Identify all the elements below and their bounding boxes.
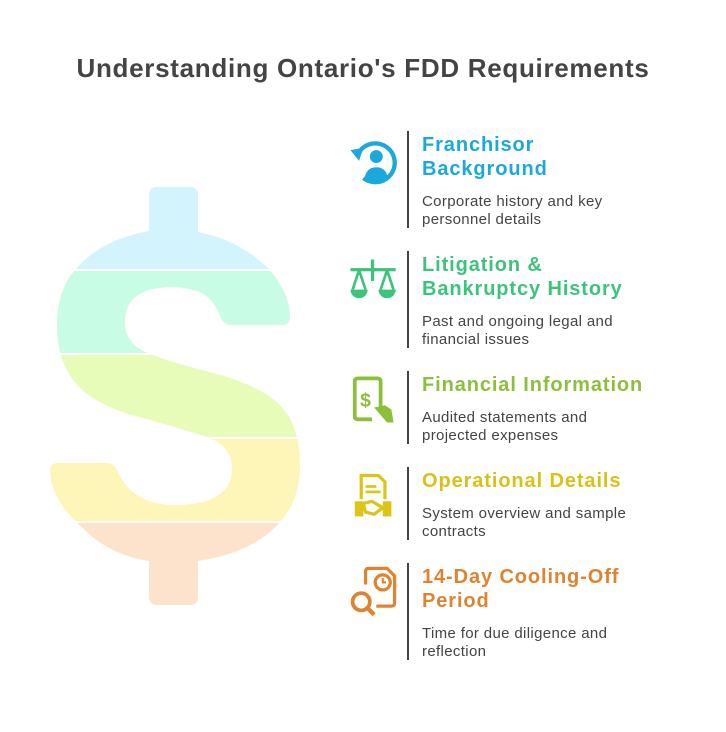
panel: litigation: financial issues (422, 331, 529, 348)
icon: dollar document with hand: $ (360, 389, 371, 411)
panel: cooling-off period: 14-Day Cooling-Off (422, 566, 619, 588)
dollar sign graphic (50, 187, 300, 605)
panel: cooling-off period: Period (422, 590, 490, 612)
panel: franchisor background: personnel details (422, 211, 541, 228)
panel: financial information: projected expenses (422, 427, 558, 444)
icon: magnifier with clock document (350, 566, 396, 616)
panel: operational details: System overview and sample (422, 505, 626, 522)
panel: operational details (354, 467, 626, 540)
panel: financial information (352, 371, 643, 444)
panel: litigation: Bankruptcy History (422, 278, 623, 300)
title: Understanding Ontario's FDD Requirements (76, 53, 650, 83)
panel: cooling-off period: Time for due diligence and (422, 625, 607, 642)
panel: franchisor background: Franchisor (422, 134, 534, 156)
panel: cooling-off period (350, 563, 619, 660)
panel: franchisor background: Corporate history and key (422, 193, 603, 210)
panel: franchisor background (350, 131, 603, 228)
panel: litigation: Past and ongoing legal and (422, 313, 613, 330)
panel: operational details: Operational Details (422, 470, 621, 492)
panel: operational details: contracts (422, 523, 486, 540)
panel: franchisor background: Background (422, 158, 548, 180)
panel: cooling-off period: reflection (422, 643, 486, 660)
icon: scales (350, 259, 396, 298)
icon: dollar document with hand (352, 376, 394, 422)
icon: person with circular arrow (350, 141, 397, 184)
panel: litigation (350, 251, 623, 348)
panel: financial information: Audited statements and (422, 409, 587, 426)
icon: document with handshake (354, 474, 392, 516)
panel: litigation: Litigation & (422, 254, 543, 276)
panel: financial information: Financial Information (422, 374, 643, 396)
